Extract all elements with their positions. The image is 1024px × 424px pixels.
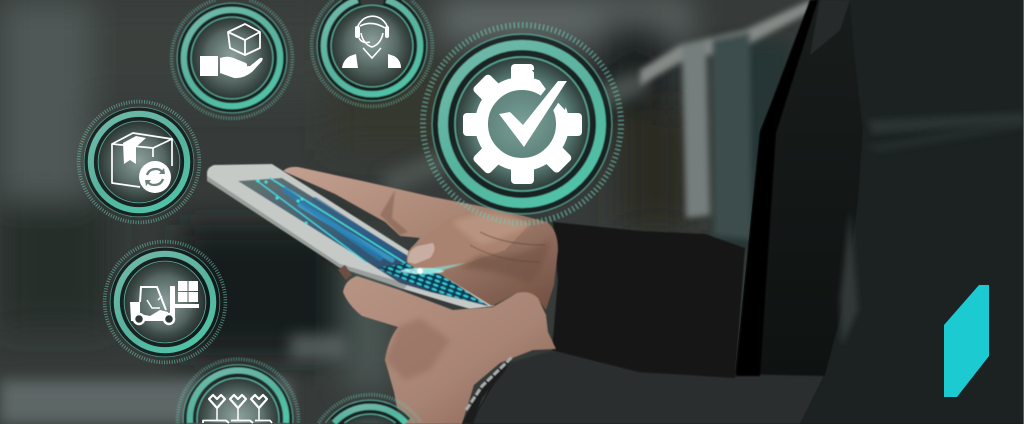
thumb of upper hand [407,211,530,272]
upper hand with index finger and thumb [283,167,558,310]
badge: quality checklist flow [178,359,298,423]
lower hand shading [385,318,450,380]
jacket: body and right arm [470,0,1024,424]
screen dot grid [377,263,488,306]
screen data streaks [256,178,405,263]
tablet screen [238,178,489,306]
lapel shadow stripe [736,0,818,376]
lower hand [343,276,556,424]
brand logo mark [944,285,989,397]
icon: hand and box [200,56,263,78]
badge: partly cropped at bottom edge [319,395,421,423]
wristwatch [462,357,512,424]
icon: pallet boxes [130,281,199,321]
badge: hand holding box [172,0,292,118]
badge: customer support headset [312,0,432,106]
icon: swap circle [139,161,171,193]
icon: headset agent [357,16,388,58]
left jacket cuff [552,222,745,378]
icon: check mark [499,81,567,147]
badge: forklift [105,242,225,362]
screen flare [400,263,466,275]
tablet [207,164,495,309]
badge: gear with check mark [423,25,621,223]
icon: cube [228,24,260,55]
badge: parcel return [79,102,199,222]
icon: gear [463,64,582,184]
